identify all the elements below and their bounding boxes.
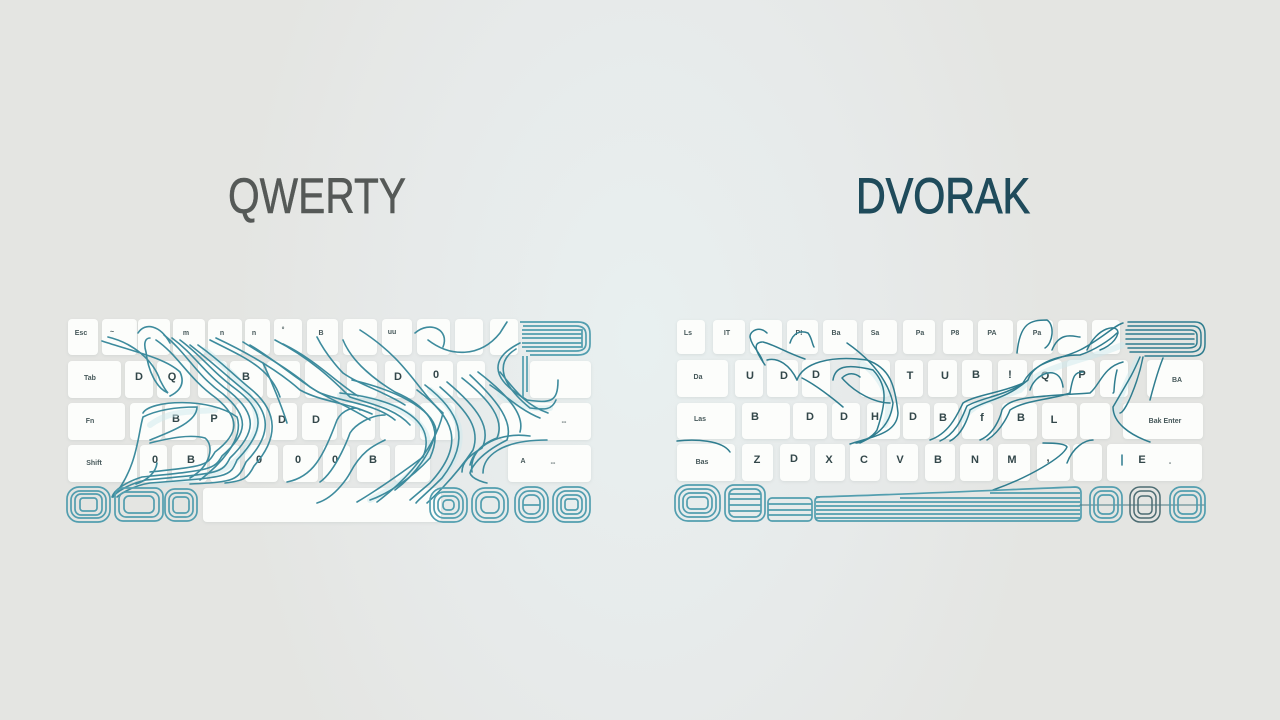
QWERTY key labels: -- bbox=[551, 460, 556, 467]
DVORAK key labels: D bbox=[909, 411, 917, 423]
DVORAK key caps bbox=[677, 320, 1203, 481]
DVORAK key labels: Bas bbox=[696, 459, 709, 466]
DVORAK bottom-row spiral keys bbox=[675, 322, 1205, 522]
DVORAK key labels: L bbox=[1051, 414, 1058, 426]
DVORAK key labels: B bbox=[972, 369, 980, 381]
DVORAK key labels: Sa bbox=[871, 330, 879, 337]
QWERTY key labels: m bbox=[183, 330, 189, 337]
QWERTY key labels: 0 bbox=[332, 454, 338, 466]
DVORAK key labels: PA bbox=[987, 330, 997, 337]
DVORAK key labels: E bbox=[1138, 454, 1146, 466]
DVORAK key labels: V bbox=[896, 454, 904, 466]
DVORAK key labels: M bbox=[1007, 454, 1017, 466]
QWERTY key labels: B bbox=[187, 454, 195, 466]
DVORAK key labels: B bbox=[1017, 412, 1025, 424]
DVORAK key labels: H bbox=[871, 411, 879, 423]
DVORAK key labels bbox=[684, 330, 1182, 467]
DVORAK key labels: ! bbox=[1008, 369, 1012, 381]
QWERTY key labels: ~ bbox=[110, 329, 114, 336]
DVORAK key labels: B bbox=[934, 454, 942, 466]
title: QWERTY: QWERTY bbox=[228, 168, 406, 224]
QWERTY key labels bbox=[75, 326, 567, 467]
QWERTY key labels: B bbox=[369, 454, 377, 466]
QWERTY key labels: Shift bbox=[86, 460, 102, 467]
panel: QWERTY keyboard bbox=[67, 319, 591, 522]
DVORAK key labels: Da bbox=[694, 374, 703, 381]
QWERTY key labels: 0 bbox=[256, 454, 262, 466]
QWERTY key labels: n bbox=[220, 330, 224, 337]
DVORAK key labels: Pa bbox=[916, 330, 924, 337]
DVORAK key labels: - bbox=[1169, 460, 1172, 467]
DVORAK key labels: B bbox=[751, 411, 759, 423]
QWERTY key labels: 0 bbox=[295, 454, 301, 466]
title: DVORAK: DVORAK bbox=[856, 168, 1030, 224]
QWERTY key labels: -- bbox=[562, 419, 567, 426]
QWERTY key labels: D bbox=[135, 371, 143, 383]
QWERTY key labels: Fn bbox=[86, 418, 94, 425]
QWERTY key labels: D bbox=[312, 414, 320, 426]
DVORAK key labels: Bak Enter bbox=[1149, 418, 1182, 425]
panel: DVORAK keyboard bbox=[675, 320, 1205, 522]
DVORAK key labels: D bbox=[806, 411, 814, 423]
DVORAK key labels: P8 bbox=[951, 330, 959, 337]
DVORAK key labels: D bbox=[790, 453, 798, 465]
DVORAK key labels: X bbox=[825, 454, 833, 466]
QWERTY key labels: B bbox=[242, 371, 250, 383]
QWERTY key labels: 0 bbox=[433, 369, 439, 381]
DVORAK key labels: D bbox=[780, 370, 788, 382]
DVORAK key labels: f bbox=[980, 412, 984, 424]
DVORAK key labels: D bbox=[812, 369, 820, 381]
DVORAK key labels: P! bbox=[796, 330, 802, 337]
DVORAK key labels: Z bbox=[754, 454, 761, 466]
QWERTY key labels: D bbox=[278, 414, 286, 426]
DVORAK key labels: P bbox=[1078, 369, 1086, 381]
DVORAK key labels: Q bbox=[1041, 370, 1050, 382]
QWERTY key labels: D bbox=[394, 371, 402, 383]
QWERTY key labels: B bbox=[318, 330, 324, 337]
DVORAK key labels: D bbox=[840, 411, 848, 423]
DVORAK key labels: T bbox=[907, 370, 914, 382]
QWERTY key labels: P bbox=[210, 413, 218, 425]
QWERTY key labels: B bbox=[172, 413, 180, 425]
DVORAK finger travel paths bbox=[677, 320, 1163, 490]
DVORAK key labels: Pa bbox=[1033, 330, 1041, 337]
DVORAK key labels: U bbox=[941, 370, 949, 382]
DVORAK key labels: Las bbox=[694, 416, 706, 423]
QWERTY key labels: ° bbox=[282, 326, 285, 334]
QWERTY key labels: A bbox=[520, 458, 526, 465]
QWERTY key caps bbox=[68, 319, 591, 522]
DVORAK key labels: B bbox=[939, 412, 947, 424]
QWERTY key labels: uu bbox=[388, 329, 396, 336]
QWERTY finger travel paths bbox=[102, 322, 558, 503]
DVORAK key labels: Ba bbox=[832, 330, 841, 337]
QWERTY key labels: 0 bbox=[152, 454, 158, 466]
QWERTY key labels: Tab bbox=[84, 375, 96, 382]
DVORAK key labels: Ls bbox=[684, 330, 692, 337]
DVORAK key labels: BA bbox=[1172, 377, 1182, 384]
DVORAK key labels: IT bbox=[724, 330, 731, 337]
QWERTY key labels: Q bbox=[168, 371, 177, 383]
QWERTY key labels: n bbox=[252, 330, 256, 337]
DVORAK key labels: N bbox=[971, 454, 979, 466]
DVORAK key labels: U bbox=[746, 370, 754, 382]
DVORAK key labels: C bbox=[860, 454, 868, 466]
QWERTY bottom-row spiral keys bbox=[67, 322, 590, 522]
QWERTY key labels: Esc bbox=[75, 330, 87, 337]
DVORAK key labels: , bbox=[1046, 452, 1050, 464]
